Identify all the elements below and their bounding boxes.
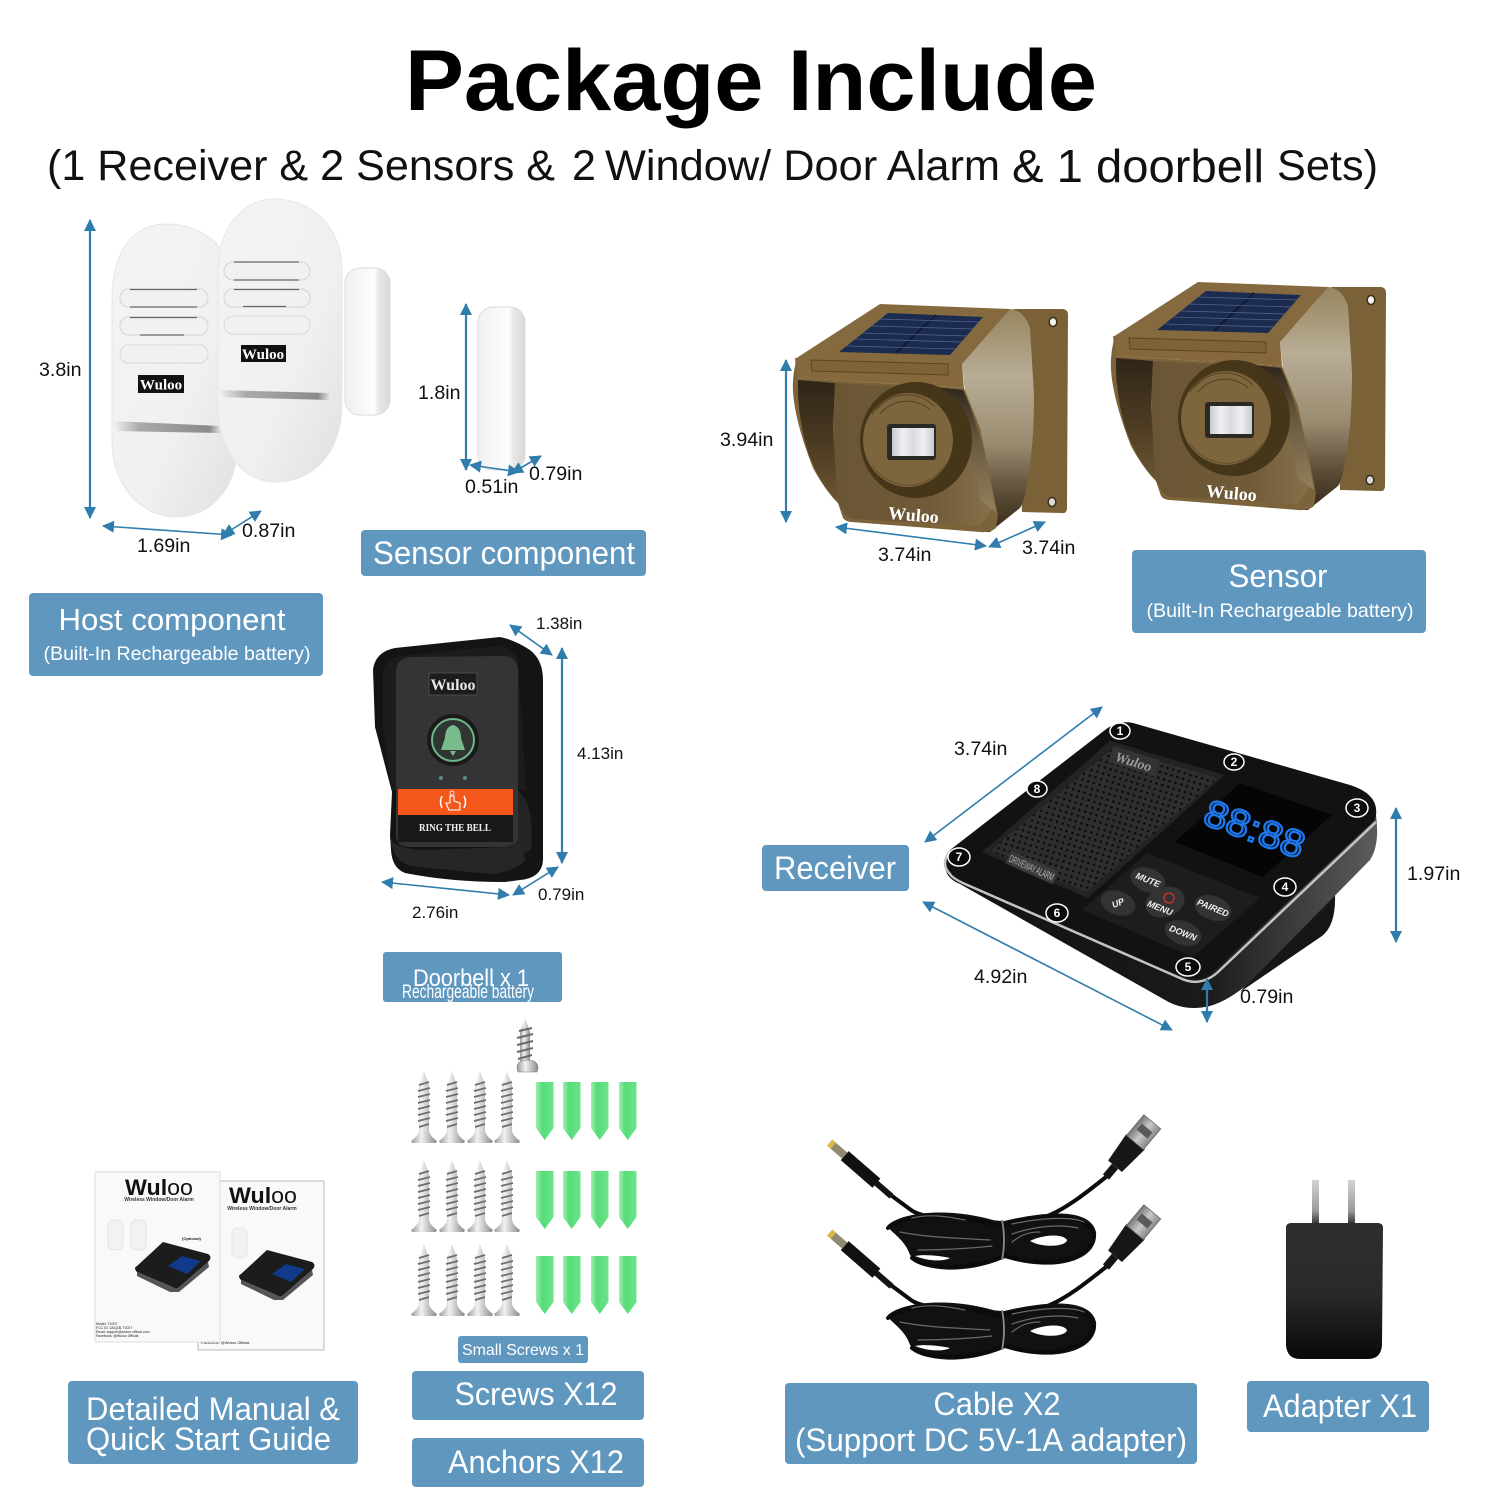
numbered screw markers: 1 xyxy=(1117,724,1124,738)
label box: host component: Host component xyxy=(58,602,286,637)
panel: manuals xyxy=(68,1172,358,1464)
ring the bell text: RING THE BELL xyxy=(419,823,491,834)
subtitle: & 1 doorbell xyxy=(1012,140,1264,192)
arrow: depth xyxy=(925,707,1102,842)
arrow: height xyxy=(785,360,787,522)
label box: doorbell xyxy=(383,952,562,1003)
arrow: depth xyxy=(989,522,1045,547)
label box: screws xyxy=(412,1371,644,1420)
arrow: width xyxy=(470,465,519,472)
icon: doorbell device xyxy=(373,637,543,882)
label box: anchors: Anchors X12 xyxy=(448,1444,624,1480)
Wuloo badge xyxy=(1108,746,1159,777)
arrow: depth xyxy=(223,511,261,535)
Wuloo badge: Wuloo xyxy=(1113,750,1153,776)
dimension labels: 4.13in xyxy=(577,744,623,763)
dimension labels: 4.92in xyxy=(974,966,1027,988)
icon: left solar sensor: Wuloo xyxy=(887,503,940,527)
icon: left window alarm host xyxy=(112,224,238,517)
dimension labels xyxy=(418,382,582,498)
label box: adapter xyxy=(1247,1381,1429,1432)
panel: sensor component xyxy=(361,304,646,576)
label box: sensor: Sensor xyxy=(1228,558,1328,594)
arrow: height xyxy=(561,648,563,863)
dimension labels xyxy=(954,738,1460,1008)
icon: right window alarm host xyxy=(218,199,342,482)
icon: left window alarm host: Wuloo xyxy=(140,378,182,394)
label box: receiver xyxy=(762,845,909,891)
numbered screw markers: 2 xyxy=(1231,755,1238,769)
bell button xyxy=(427,714,479,780)
dimension labels: 3.74in xyxy=(878,544,931,566)
buttons: DOWN xyxy=(1168,923,1199,943)
label box: manuals xyxy=(68,1381,358,1464)
icon: rear manual xyxy=(198,1181,324,1350)
icon: rear manual: Wuloo xyxy=(229,1183,297,1208)
Wuloo badge: Wuloo xyxy=(430,677,476,694)
icon: front manual: Facebook: @Wuloo Official xyxy=(96,1334,139,1338)
dimension labels: 0.79in xyxy=(529,463,582,485)
label box: sensor: (Built-In Rechargeable battery) xyxy=(1146,600,1414,622)
arrow: height xyxy=(89,220,91,518)
buttons: MENU xyxy=(1146,898,1175,918)
numbered screw markers xyxy=(948,723,1368,976)
buttons: UP xyxy=(1110,896,1127,910)
dimension labels: 2.76in xyxy=(412,903,458,922)
label box: anchors xyxy=(412,1438,644,1487)
icon: front manual: (Optional) xyxy=(182,1236,202,1241)
label box: small screws: Small Screws x 1 xyxy=(462,1342,584,1359)
driveway alarm label xyxy=(1005,850,1058,884)
panel: solar motion sensors xyxy=(720,282,1426,633)
dimension labels xyxy=(720,429,1075,566)
arrow: width xyxy=(836,527,986,546)
dimension labels: 3.8in xyxy=(39,359,82,381)
icon: upper usb cable xyxy=(826,1114,1161,1270)
dimension labels: 3.94in xyxy=(720,429,773,451)
caption background xyxy=(398,815,513,842)
label box: screws: Screws X12 xyxy=(454,1376,618,1412)
buttons: MUTE xyxy=(1134,871,1163,890)
arrow: height xyxy=(465,304,467,470)
icon: front manual xyxy=(95,1172,220,1342)
display: 88:88 xyxy=(1198,792,1310,867)
arrow: height xyxy=(1395,808,1397,942)
label box: sensor component: Sensor component xyxy=(373,535,635,571)
arrow: width xyxy=(382,882,509,895)
buttons xyxy=(1097,863,1235,951)
display xyxy=(1175,783,1332,877)
dimension labels: 3.74in xyxy=(1022,537,1075,559)
arrow: top depth xyxy=(510,625,552,655)
icon: front manual: Wuloo xyxy=(125,1175,193,1200)
button panel xyxy=(1082,853,1260,957)
arrow: width xyxy=(103,526,232,535)
icon: door magnet xyxy=(345,268,390,415)
subtitle: 2 xyxy=(572,142,596,190)
label box: manuals: Quick Start Guide xyxy=(86,1421,331,1457)
subtitle xyxy=(47,140,1378,192)
icon: right window alarm host: Wuloo xyxy=(242,347,284,363)
dimension labels xyxy=(39,359,295,557)
subtitle: Sets) xyxy=(1277,142,1378,190)
arrow: depth xyxy=(512,456,541,473)
icon: front manual: Wireless Window/Door Alarm xyxy=(124,1197,194,1203)
panel: host component xyxy=(29,199,390,676)
buttons: PAIRED xyxy=(1196,897,1231,919)
icon: receiver device xyxy=(945,722,1377,1008)
subtitle: (1 Receiver & 2 Sensors & xyxy=(47,142,555,190)
icon: screws x12 xyxy=(411,1071,520,1316)
dimension labels: 0.79in xyxy=(1240,986,1293,1008)
driveway alarm label: DRIVEWAY ALARM xyxy=(1007,853,1056,884)
icon: lower usb cable xyxy=(826,1204,1161,1360)
dimension labels: 0.87in xyxy=(242,520,295,542)
panel: receiver xyxy=(762,707,1460,1030)
label box: sensor xyxy=(1132,550,1426,633)
icon: right solar sensor: Wuloo xyxy=(1205,481,1258,505)
icon: small screw xyxy=(517,1018,538,1072)
dimension labels: 3.74in xyxy=(954,738,1007,760)
icon: front manual: Email: support@wuloo official.com xyxy=(96,1330,150,1334)
arrow: base height xyxy=(1206,979,1208,1022)
arrow: lower depth xyxy=(513,867,558,895)
label box: cable: (Support DC 5V-1A adapter) xyxy=(795,1422,1187,1458)
numbered screw markers: 5 xyxy=(1185,960,1192,974)
panel: doorbell xyxy=(373,614,623,1003)
icon: power adapter xyxy=(1286,1180,1383,1359)
icon: front manual: FCC ID: 2AQZB-T1007 xyxy=(96,1326,132,1330)
label box: host component: (Built-In Rechargeable battery) xyxy=(44,643,310,665)
numbered screw markers: 4 xyxy=(1282,880,1289,894)
subtitle: Window/ Door Alarm xyxy=(605,142,1000,190)
label box: cable xyxy=(785,1383,1197,1464)
dimension labels: 1.38in xyxy=(536,614,582,633)
numbered screw markers: 6 xyxy=(1054,906,1061,920)
label box: doorbell: Doorbell x 1 xyxy=(413,965,529,992)
dimension labels: 1.97in xyxy=(1407,863,1460,885)
panel: cables xyxy=(785,1114,1197,1464)
icon: front manual: Model: T1007 xyxy=(96,1322,117,1326)
dimension labels: 0.51in xyxy=(465,476,518,498)
orange touch strip xyxy=(398,789,513,815)
panel: screws and anchors xyxy=(411,1018,644,1487)
label box: cable: Cable X2 xyxy=(934,1386,1060,1422)
label box: receiver: Receiver xyxy=(774,850,896,886)
panel: adapter xyxy=(1247,1180,1429,1432)
numbered screw markers: 3 xyxy=(1354,801,1361,815)
icon: rear manual: Facebook: @Wuloo Official xyxy=(201,1340,249,1345)
dimension labels: 1.69in xyxy=(137,535,190,557)
arrow: width xyxy=(923,902,1172,1030)
title: Package Include xyxy=(405,33,1097,129)
label box: manuals: Detailed Manual & xyxy=(86,1391,340,1427)
dimension labels: 0.79in xyxy=(538,885,584,904)
label box: host component xyxy=(29,593,323,676)
dimension labels: 1.8in xyxy=(418,382,460,404)
icon: anchors x12 xyxy=(536,1082,636,1314)
icon: magnet sensor bar xyxy=(478,307,525,470)
numbered screw markers: 8 xyxy=(1034,782,1041,796)
dimension labels xyxy=(412,614,623,922)
label box: doorbell: Rechargeable battery xyxy=(402,982,534,1003)
icon: left solar sensor xyxy=(793,304,1068,532)
label box: small screws xyxy=(458,1336,588,1363)
icon: right solar sensor xyxy=(1111,282,1386,510)
icon: rear manual: Wireless Window/Door Alarm xyxy=(227,1206,297,1212)
numbered screw markers: 7 xyxy=(956,850,963,864)
label box: adapter: Adapter X1 xyxy=(1263,1388,1417,1424)
